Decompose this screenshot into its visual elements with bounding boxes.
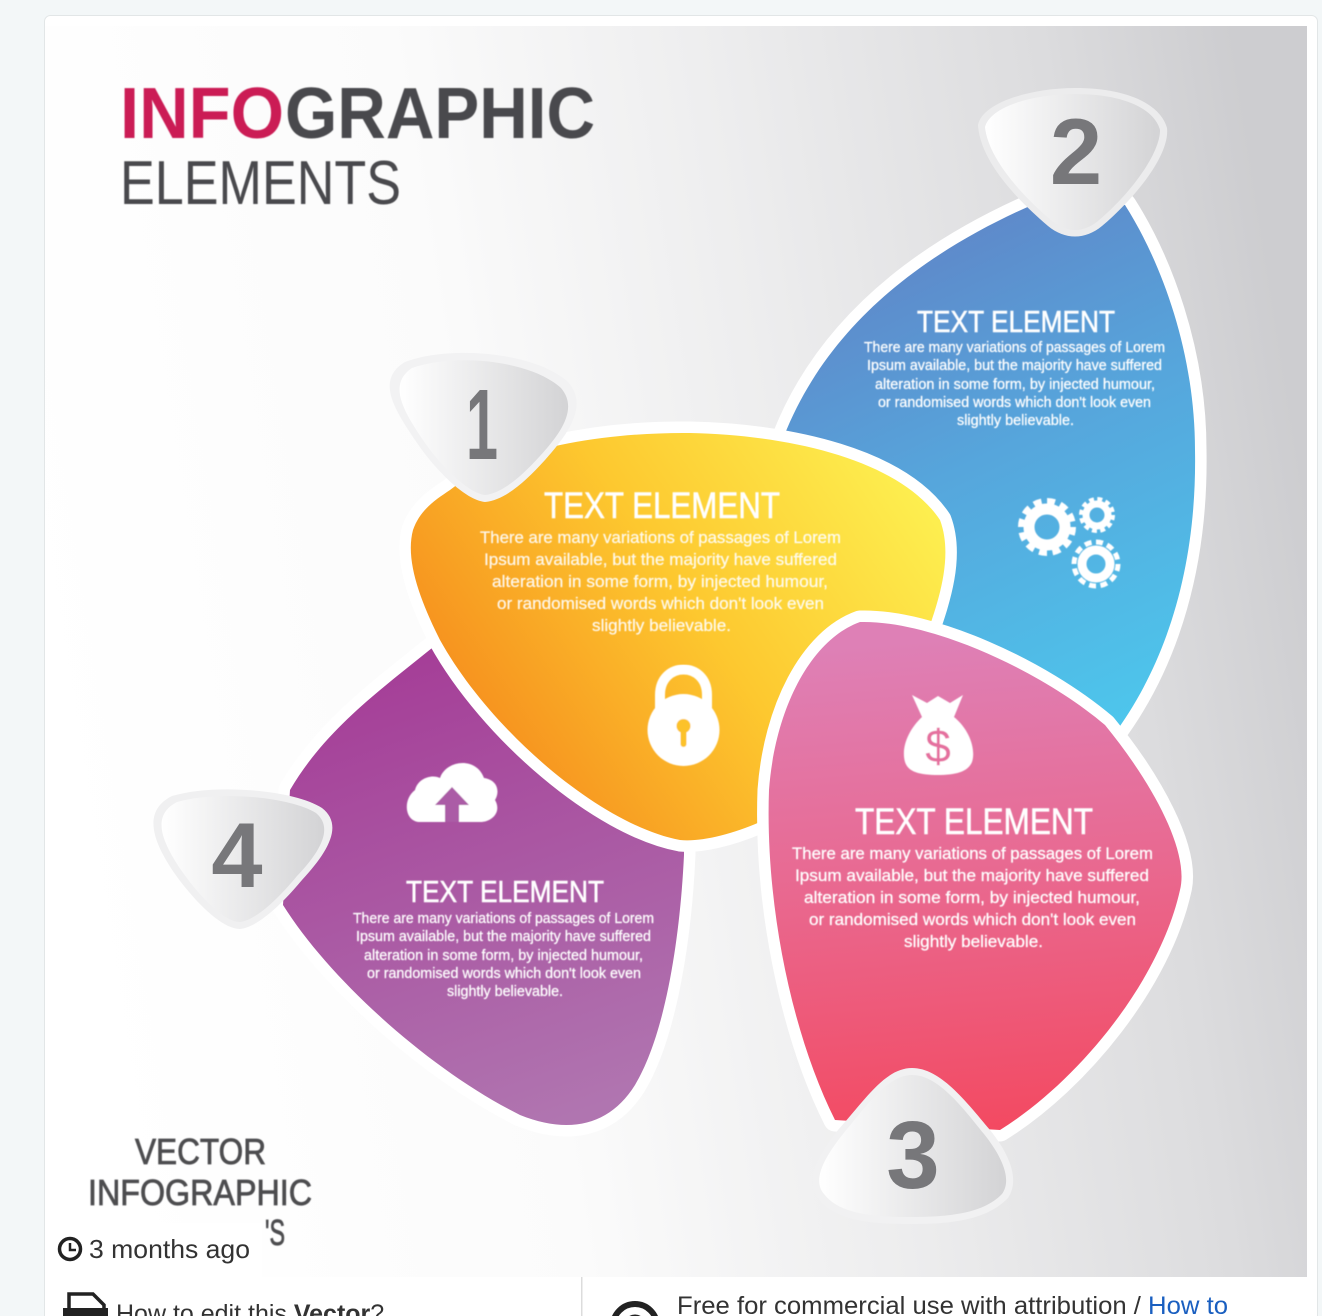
title: INFO bbox=[120, 74, 284, 154]
text block: pink: slightly believable. bbox=[904, 932, 1043, 951]
watermark text: VECTOR bbox=[135, 1131, 266, 1172]
text block: pink: or randomised words which don't look even bbox=[809, 910, 1136, 929]
text block: pink: Ipsum available, but the majority have suffered bbox=[795, 866, 1149, 885]
icon: file bbox=[63, 1294, 108, 1316]
heading: purple: TEXT ELEMENT bbox=[406, 874, 604, 909]
text block: blue: There are many variations of passages of Lorem bbox=[864, 340, 1165, 356]
timestamp label bbox=[52, 1223, 262, 1277]
heading: pink: TEXT ELEMENT bbox=[855, 801, 1093, 842]
text block: pink: There are many variations of passages of Lorem bbox=[792, 844, 1153, 863]
text block: pink bbox=[792, 844, 1153, 951]
text block: purple: alteration in some form, by injected humour, bbox=[364, 948, 643, 964]
edit info row bbox=[63, 1294, 384, 1316]
badge 1 bbox=[390, 353, 577, 502]
license row bbox=[613, 1292, 1228, 1316]
text block: yellow bbox=[480, 528, 841, 635]
heading: yellow: TEXT ELEMENT bbox=[544, 485, 780, 526]
badge 2 bbox=[978, 88, 1167, 236]
icon: money bag: $ bbox=[925, 720, 951, 772]
title bbox=[120, 74, 595, 218]
icon: copyright bbox=[613, 1304, 657, 1316]
text block: pink: alteration in some form, by injected humour, bbox=[804, 888, 1140, 907]
icon: padlock bbox=[648, 670, 720, 766]
number 1: 1 bbox=[466, 369, 498, 481]
text block: purple: There are many variations of passages of Lorem bbox=[353, 911, 654, 927]
text block: yellow: alteration in some form, by injected humour, bbox=[492, 572, 828, 591]
text block: purple bbox=[353, 911, 654, 1000]
text block: blue bbox=[864, 340, 1165, 429]
text block: purple: slightly believable. bbox=[447, 984, 563, 1000]
number 3: 3 bbox=[886, 1102, 940, 1209]
text block: purple: Ipsum available, but the majority have suffered bbox=[356, 929, 651, 945]
text block: blue: or randomised words which don't look even bbox=[878, 395, 1151, 411]
panel: purple petal 4 bbox=[283, 648, 684, 1125]
panel: pink petal 3 bbox=[769, 622, 1182, 1130]
icon: clock bbox=[60, 1238, 80, 1260]
badge 4 bbox=[153, 789, 332, 929]
time text: 3 months ago bbox=[89, 1234, 250, 1264]
icon: money bag bbox=[904, 695, 973, 775]
text block: yellow: or randomised words which don't look even bbox=[497, 594, 824, 613]
text block: yellow: There are many variations of passages of Lorem bbox=[480, 528, 841, 547]
text block: yellow: slightly believable. bbox=[592, 616, 731, 635]
number 2: 2 bbox=[1050, 99, 1102, 204]
text block: yellow: Ipsum available, but the majority have suffered bbox=[484, 550, 837, 569]
watermark text bbox=[88, 1131, 312, 1253]
panel: blue petal 2 bbox=[784, 205, 1195, 737]
title: GRAPHIC bbox=[285, 74, 595, 154]
watermark text: INFOGRAPHIC bbox=[88, 1172, 312, 1213]
text block: blue: alteration in some form, by injected humour, bbox=[875, 377, 1155, 393]
panel: yellow petal 1 bbox=[411, 433, 945, 840]
title: ELEMENTS bbox=[120, 149, 401, 218]
text block: purple: or randomised words which don't look even bbox=[367, 966, 641, 982]
divider bbox=[581, 1277, 582, 1316]
badge 3 bbox=[813, 1068, 1013, 1224]
text block: blue: Ipsum available, but the majority have suffered bbox=[867, 358, 1162, 374]
icon: cloud upload bbox=[407, 763, 497, 822]
number 4: 4 bbox=[211, 805, 263, 907]
watermark text: 'S bbox=[265, 1212, 285, 1253]
icon: gears bbox=[1021, 499, 1118, 586]
heading: blue: TEXT ELEMENT bbox=[917, 304, 1115, 339]
text block: blue: slightly believable. bbox=[957, 413, 1074, 429]
